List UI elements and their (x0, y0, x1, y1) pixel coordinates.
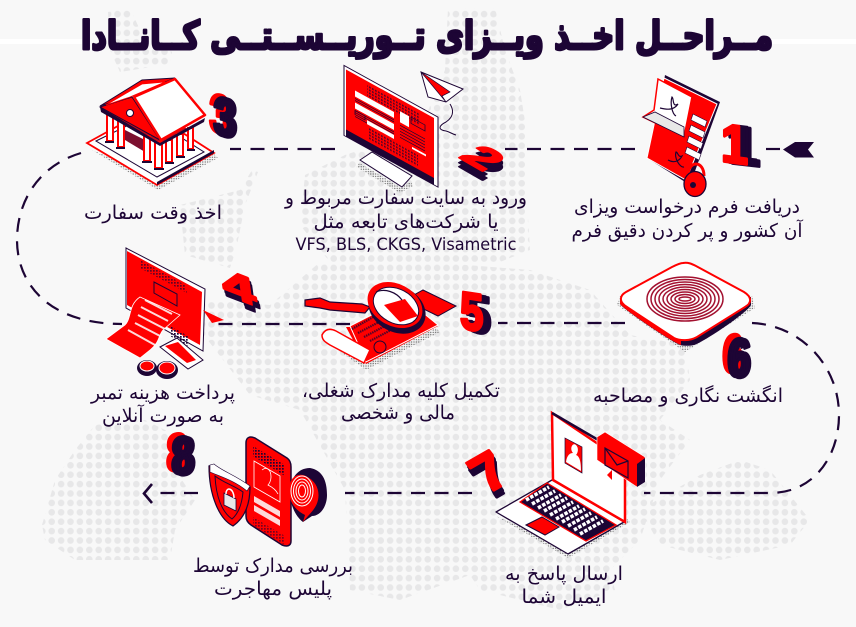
number 2: 2 (450, 140, 515, 177)
text step 2 (284, 187, 527, 255)
number 8: 8 (171, 424, 193, 486)
text step 3: اخذ وقت سفارت (84, 202, 222, 224)
step 1: form icon (643, 75, 720, 196)
number 4: 4 (222, 266, 262, 323)
step 3: bank icon (87, 78, 218, 190)
text step 6: انگشت نگاری و مصاحبه (593, 384, 783, 407)
number 6: 6 (727, 326, 749, 391)
number 7: 7 (458, 441, 520, 504)
start arrow (783, 142, 814, 158)
number 2: 2 (450, 145, 515, 182)
dashed journey path (17, 149, 839, 493)
number 8: 8 (174, 425, 196, 487)
text step 5: مالی و شخصی (341, 402, 455, 424)
step 6: fingerprint icon (617, 263, 755, 352)
number 7: 7 (460, 445, 522, 508)
number 1: 1 (721, 112, 748, 176)
number 8: 8 (166, 421, 188, 483)
text step 7: ایمیل شما (522, 586, 606, 608)
text step 2: یا شرکت‌های تابعه مثل (314, 211, 498, 233)
step 4: payment icon (106, 248, 224, 379)
number 5: 5 (468, 285, 491, 347)
text step 2: VFS, BLS, CKGS, Visametric (296, 235, 516, 255)
text step 7: ارسال پاسخ به (505, 563, 623, 585)
text step 1 (572, 196, 803, 242)
number 5: 5 (465, 284, 488, 346)
text step 5 (302, 380, 500, 424)
text step 4 (90, 382, 235, 427)
text step 8: بررسی مدارک توسط (193, 555, 353, 577)
step 5: document and magnifier icon (305, 273, 456, 370)
step 8: phone, shield and chat icon (209, 437, 327, 546)
text step 1: دریافت فرم درخواست ویزای (574, 196, 800, 218)
text step 1: آن کشور و پر کردن دقیق فرم (572, 218, 803, 242)
number 3: 3 (209, 83, 231, 147)
paper plane (421, 72, 463, 135)
text step 8 (193, 555, 353, 600)
title band (0, 39, 856, 44)
text step 7 (505, 563, 623, 608)
text step 5: تکمیل کلیه مدارک شغلی، (302, 380, 500, 402)
text step 8: پلیس مهاجرت (214, 578, 332, 600)
text step 4: پرداخت هزینه تمبر (90, 382, 235, 404)
number 5: 5 (460, 282, 483, 344)
number 7: 7 (461, 448, 523, 511)
number 1: 1 (726, 113, 758, 177)
number 6: 6 (730, 327, 752, 392)
text step 4: به صورت آنلاین (102, 403, 224, 427)
step 2: monitor icon (344, 65, 438, 190)
number 4: 4 (221, 263, 261, 320)
number 6 (722, 322, 752, 392)
number 4: 4 (219, 259, 259, 316)
number 2: 2 (450, 149, 515, 186)
step 7: laptop icon (496, 413, 645, 558)
number 1: 1 (729, 114, 761, 178)
number 6: 6 (722, 322, 744, 387)
end arrow (144, 484, 152, 503)
number 3: 3 (216, 87, 238, 151)
number 8 (166, 421, 196, 487)
number 3: 3 (213, 86, 235, 150)
text step 2: ورود به سایت سفارت مربوط و (284, 187, 527, 209)
